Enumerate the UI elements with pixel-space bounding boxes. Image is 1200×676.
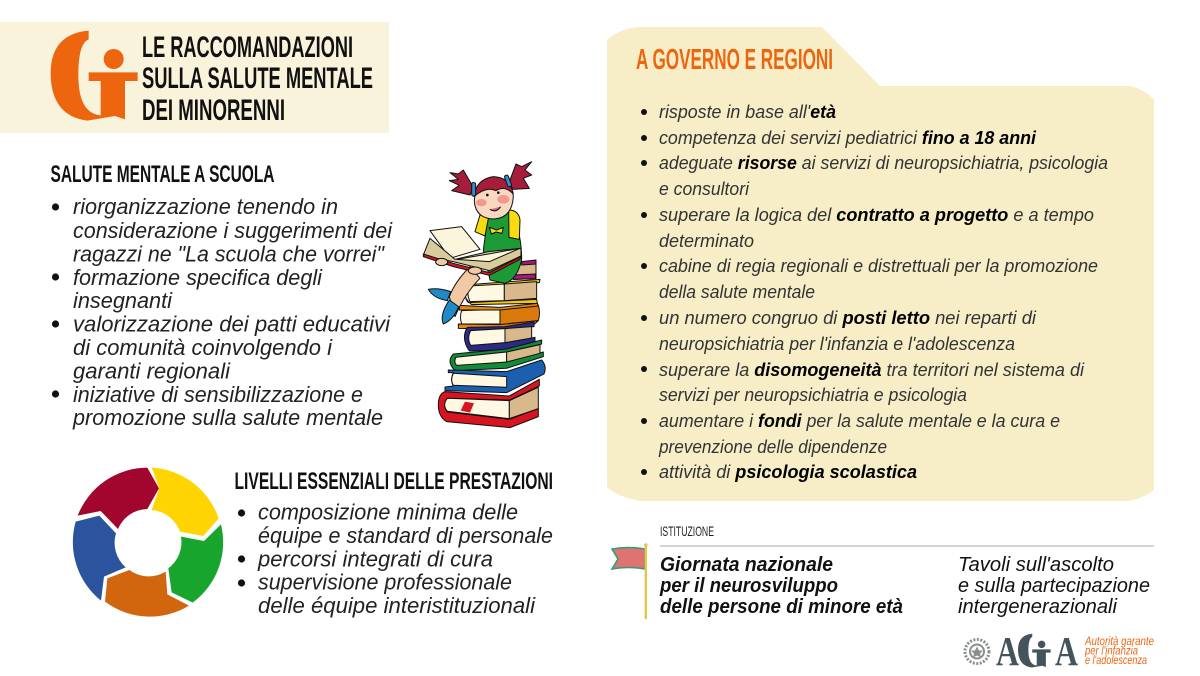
bullet list: delle équipe interistituzionali (258, 593, 536, 618)
bullet list: composizione minima delle (258, 500, 518, 524)
icon: flag (612, 543, 648, 619)
icon: colour cycle wheel (73, 468, 223, 617)
recommendation list (641, 102, 1108, 482)
bullet list: promozione sulla salute mentale (72, 405, 383, 430)
icon: emblem (965, 640, 989, 664)
header panel (0, 22, 389, 133)
title: DEI MINORENNI (142, 94, 285, 127)
bullet list: formazione specifica degli (73, 265, 323, 290)
section: salute mentale a scuola (50, 161, 393, 430)
bullet list: supervisione professionale (258, 570, 512, 594)
text: tavoli (958, 553, 1150, 618)
recommendation list: competenza dei servizi pediatrici fino a 18 anni (659, 128, 1037, 148)
recommendation list: superare la disomogeneità tra territori nel sistema di (659, 360, 1085, 380)
recommendation list: un numero congruo di posti letto nei reparti di (659, 308, 1037, 328)
recommendation list: cabine di regia regionali e distrettuali per la promozione (659, 256, 1098, 276)
recommendation list: determinato (659, 231, 754, 251)
title: LE RACCOMANDAZIONI (142, 31, 353, 64)
heading: A GOVERNO E REGIONI (636, 44, 833, 76)
bullet list: valorizzazione dei patti educativi (73, 312, 391, 336)
wordmark: A (1055, 628, 1078, 674)
heading: SALUTE MENTALE A SCUOLA (50, 161, 274, 188)
recommendation list: aumentare i fondi per la salute mentale e la cura e (659, 411, 1060, 431)
text: authority name: Autorità garante (1084, 636, 1154, 648)
text: tavoli: e sulla partecipazione (958, 574, 1150, 597)
icon: Gi logo (51, 31, 138, 121)
bullet list (238, 500, 553, 618)
text: authority name: per l'infanzia (1084, 646, 1138, 658)
recommendation list: attività di psicologia scolastica (659, 462, 917, 482)
panel: a governo e regioni (607, 27, 1154, 501)
text: giornata nazionale: Giornata nazionale (660, 553, 833, 576)
bullet list: garanti regionali (73, 358, 231, 384)
recommendation list: adeguate risorse ai servizi di neuropsichiatria, psicologia (659, 153, 1108, 173)
wordmark: A (996, 628, 1019, 674)
recommendation list: risposte in base all'età (659, 102, 836, 122)
title: SULLA SALUTE MENTALE (142, 62, 373, 95)
recommendation list: superare la logica del contratto a progetto e a tempo (659, 205, 1094, 225)
recommendation list: prevenzione delle dipendenze (658, 437, 887, 457)
text: giornata nazionale (659, 553, 903, 618)
bullet list: riorganizzazione tenendo in (73, 194, 338, 219)
wordmark (996, 628, 1078, 674)
bullet list: insegnanti (73, 288, 173, 313)
label: ISTITUZIONE (660, 523, 714, 539)
text: tavoli: intergenerazionali (958, 595, 1118, 618)
recommendation list: della salute mentale (659, 282, 815, 302)
section: istituzione (612, 523, 1154, 619)
bullet list: iniziative di sensibilizzazione e (73, 382, 363, 407)
bullet list: di comunità coinvolgendo i (73, 335, 333, 360)
text: giornata nazionale: per il neurosviluppo (659, 574, 838, 597)
bullet list: percorsi integrati di cura (257, 546, 493, 572)
girl (423, 162, 532, 324)
text: authority name (1084, 636, 1154, 667)
bullet list: considerazione i suggerimenti dei (73, 218, 393, 243)
heading: LIVELLI ESSENZIALI DELLE PRESTAZIONI (234, 468, 553, 495)
bullet list (52, 194, 393, 430)
text: tavoli: Tavoli sull'ascolto (958, 553, 1114, 576)
text: authority name: e l'adolescenza (1085, 655, 1147, 667)
recommendation list: neuropsichiatria per l'infanzia e l'adolescenza (659, 334, 1015, 354)
section: livelli essenziali delle prestazioni (73, 468, 553, 618)
recommendation list: servizi per neuropsichiatria e psicologia (659, 385, 967, 405)
recommendation list: e consultori (659, 179, 750, 199)
title (142, 31, 373, 127)
illustration: girl reading on a stack of books (423, 162, 545, 428)
bullet list: équipe e standard di personale (258, 523, 553, 548)
logo: AGIA (965, 628, 1154, 674)
book stack (438, 260, 545, 428)
bullet list: ragazzi ne "La scuola che vorrei" (73, 242, 385, 266)
text: giornata nazionale: delle persone di minore età (660, 595, 903, 618)
